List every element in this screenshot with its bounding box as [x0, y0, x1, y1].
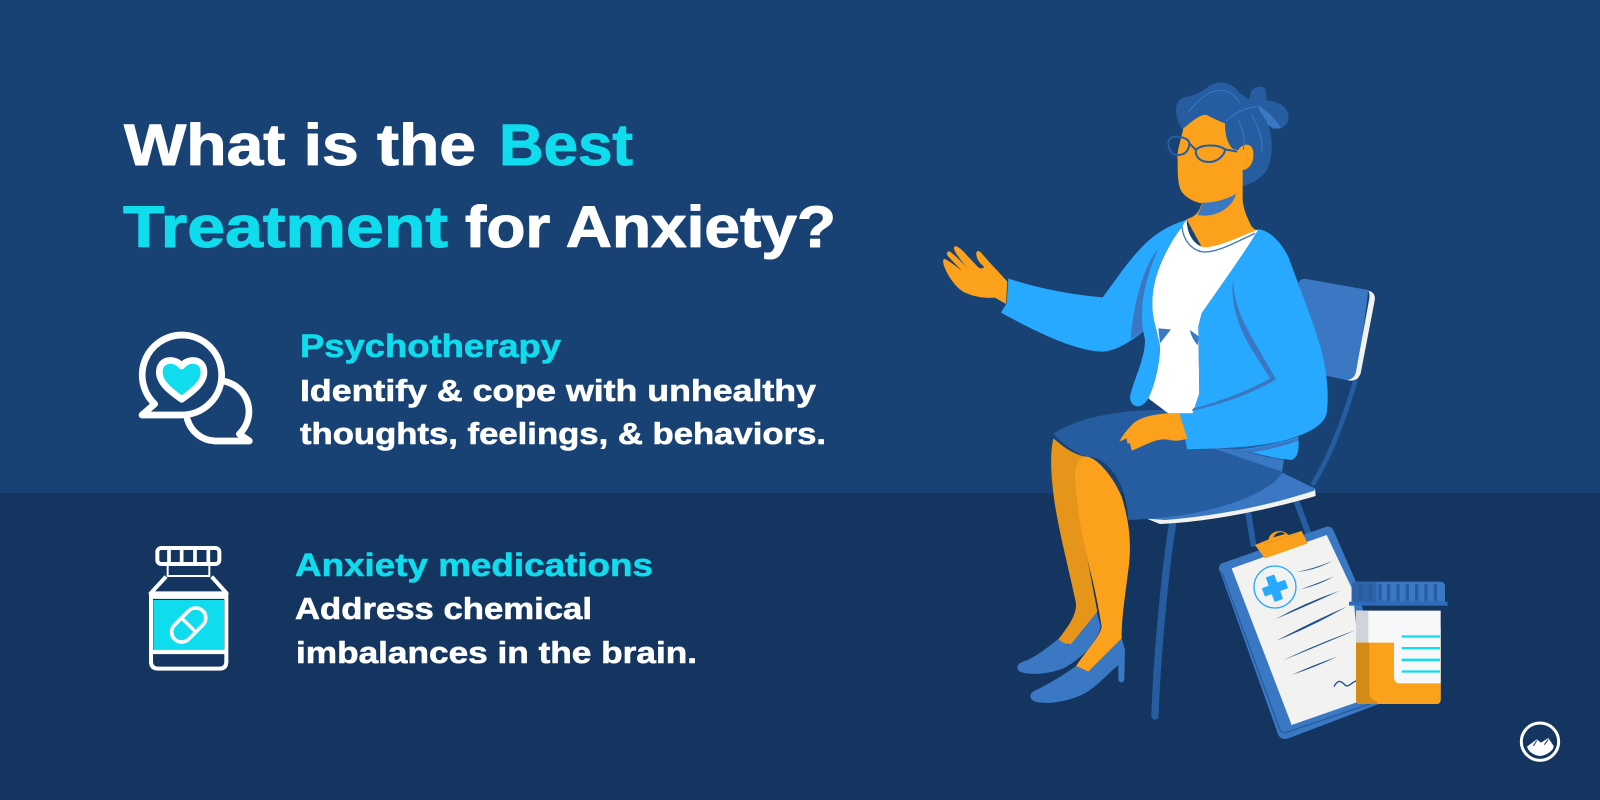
hands [943, 246, 1187, 451]
chair frame [1155, 382, 1355, 716]
text block: psychotherapy: Psychotherapy [300, 328, 561, 364]
text block: anxiety medications: Address chemical [295, 591, 592, 626]
chair back [1298, 279, 1375, 381]
text block: psychotherapy: Identify & cope with unhealthy [300, 373, 817, 408]
jacket [1001, 220, 1328, 449]
skirt [1053, 410, 1299, 520]
glasses [1168, 137, 1237, 162]
label [1394, 627, 1441, 683]
text block: psychotherapy: thoughts, feelings, & behaviors. [300, 416, 826, 451]
title: What is the [124, 113, 476, 178]
icon: speech bubbles with heart [142, 335, 249, 441]
text block: anxiety medications: Anxiety medications [295, 547, 653, 583]
illustration: clipboard [1219, 527, 1385, 739]
title: for Anxiety? [465, 195, 836, 260]
illustration: seated woman on chair [943, 82, 1375, 716]
title [123, 113, 836, 260]
text block: anxiety medications [295, 547, 697, 670]
icon: medicine bottle [151, 547, 227, 669]
lid [1349, 582, 1448, 606]
blouse [1148, 219, 1258, 413]
title: Best [499, 113, 633, 178]
legs and shoes [1017, 438, 1130, 703]
text block: psychotherapy [300, 328, 826, 451]
chair seat [1147, 468, 1316, 524]
text block: anxiety medications: imbalances in the brain. [296, 635, 697, 670]
logo: mountain badge [1521, 723, 1559, 760]
head and hair [1168, 82, 1289, 250]
illustration: medicine jar [1349, 582, 1448, 704]
title: Treatment [123, 195, 448, 260]
